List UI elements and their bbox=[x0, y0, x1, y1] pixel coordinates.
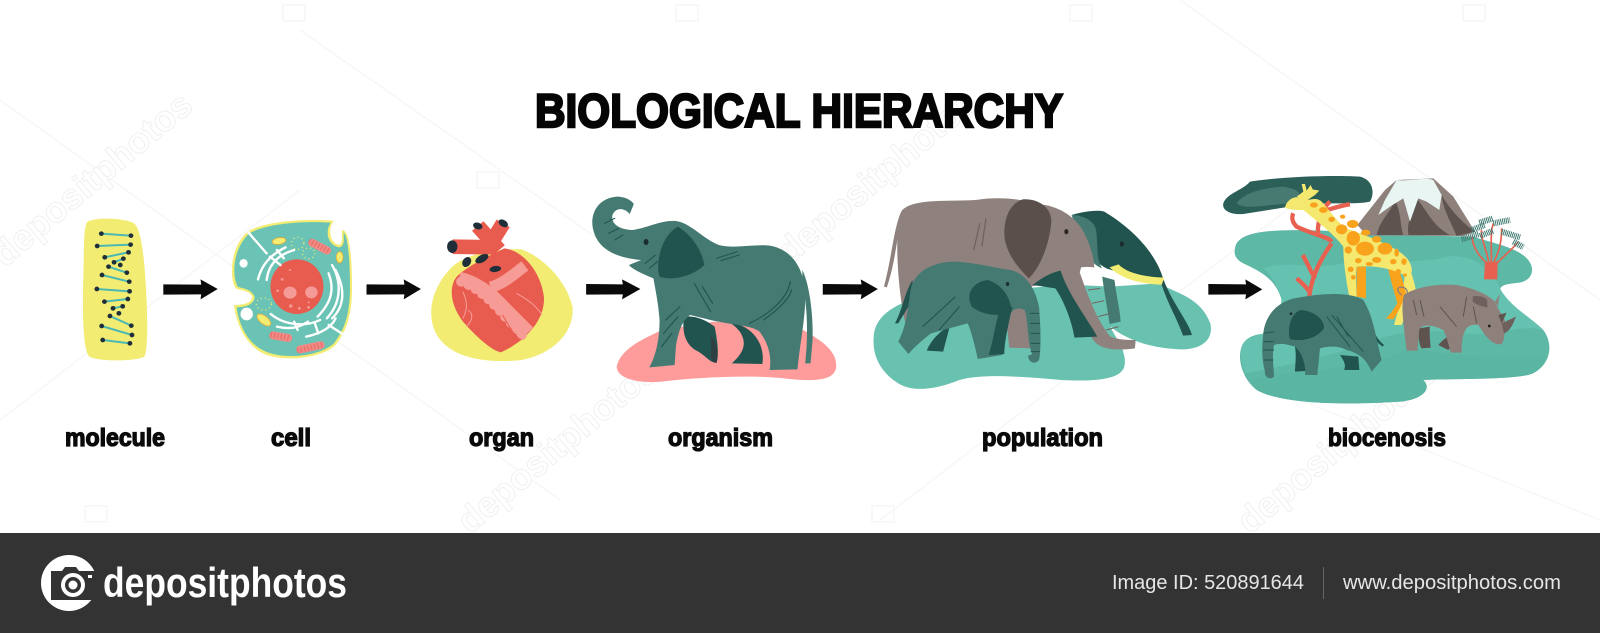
text: depositphotos bbox=[769, 80, 985, 271]
panel: molecule and cell and organ illustrations bbox=[83, 218, 573, 361]
arrow: organ to organism bbox=[586, 279, 640, 299]
label: cell: cell bbox=[271, 424, 311, 452]
icon: acacia tree bbox=[1223, 176, 1373, 296]
arrow: cell to organ bbox=[367, 279, 421, 299]
panel: organism and population illustrations bbox=[586, 197, 1211, 389]
mitochondria bbox=[269, 237, 333, 354]
icon: small tree bbox=[1462, 218, 1523, 279]
footer bar bbox=[0, 533, 1600, 633]
title: BIOLOGICAL HIERARCHY bbox=[535, 84, 1063, 137]
icon: mountain bbox=[1357, 178, 1475, 236]
image id: Image ID: 520891644 bbox=[1112, 572, 1304, 594]
label: population: population bbox=[982, 424, 1103, 452]
gray elephant bbox=[884, 198, 1136, 350]
icon: organ heart bbox=[431, 218, 573, 361]
icon: organism elephant bbox=[592, 197, 836, 382]
nucleus bbox=[270, 259, 323, 314]
small elephant bbox=[895, 262, 1041, 363]
text: depositphotos bbox=[449, 350, 665, 541]
logo wordmark: depositphotos bbox=[103, 559, 347, 606]
arrow: organism to population bbox=[823, 279, 878, 299]
icon: rhino bbox=[1398, 285, 1516, 353]
icon: population elephants bbox=[874, 198, 1211, 389]
label: organ: organ bbox=[469, 424, 534, 452]
icon: molecule bbox=[83, 219, 147, 360]
dark front leg bbox=[1033, 271, 1097, 338]
icon: cell bbox=[232, 220, 352, 358]
icon: savanna ground bbox=[1235, 230, 1549, 403]
endoplasmic reticulum bbox=[248, 232, 344, 337]
panel: biocenosis illustration bbox=[1208, 176, 1549, 403]
text: depositphotos bbox=[1229, 350, 1445, 541]
label: molecule: molecule bbox=[65, 424, 165, 452]
icon: camera logo bbox=[41, 555, 97, 611]
arrow: population to biocenosis bbox=[1208, 279, 1262, 299]
icon: elephant bbox=[1262, 294, 1384, 378]
dark elephant behind bbox=[1072, 211, 1192, 336]
icon: giraffe bbox=[1285, 184, 1416, 325]
label: organism: organism bbox=[668, 424, 773, 452]
website url: www.depositphotos.com bbox=[1342, 572, 1561, 594]
arrow: molecule to cell bbox=[163, 279, 218, 299]
label: biocenosis: biocenosis bbox=[1328, 424, 1446, 452]
